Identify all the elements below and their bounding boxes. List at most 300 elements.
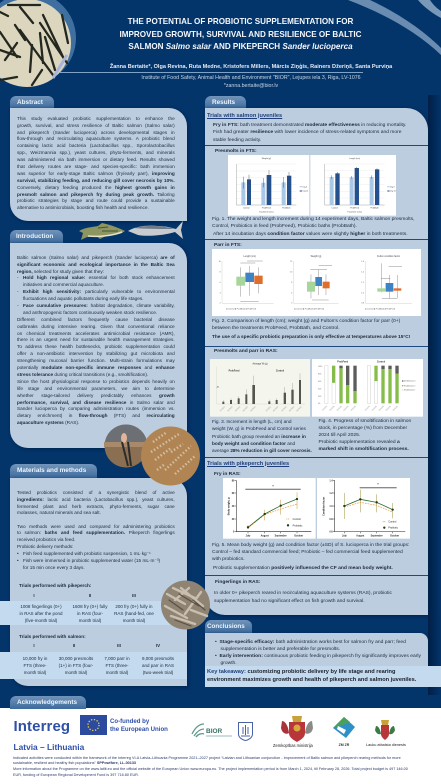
panel: introduction: [10, 243, 187, 448]
text: fry in FTS: Fry in FTS: bath treatment demonstrated moderate effectiveness in reducing mortality.: [213, 123, 406, 128]
chart: fig 5 body weight: 0: [233, 532, 235, 534]
panel: materials and methods: [10, 478, 187, 686]
chart: fig 4 smoltification stacked bars: ProbFeed: [337, 361, 348, 363]
chart: fig 3 average weight: 02/2025: [235, 406, 241, 412]
chart: fig 5 body weight: Body weight, g: [228, 497, 231, 515]
header photo: salmon fry: [0, 0, 76, 87]
introduction text: region, selected for study given that they:: [17, 269, 104, 274]
chart: fig 5 condition factor: 0.6: [329, 532, 333, 534]
chart: fig 1 weight and length: Weight (g): [262, 157, 271, 160]
callout: key takeaway: environment maximizes growth and health of pikeperch and salmon juveniles.: [207, 677, 416, 683]
chart: fig 1 weight and length: Length (cm): [349, 157, 360, 160]
text: probiotic influence: Probiotic supplementation positively influenced the CF and mean body weight.: [213, 566, 393, 570]
chart: fig 3 average weight: 04/2025: [250, 406, 256, 412]
chart: fig 4 smoltification stacked bars: 80%: [318, 374, 322, 376]
abstract text: was administered via bath immersion or dietary feed. Results showed: [17, 157, 175, 162]
chart: fig 1 weight and length: ProbFeed: [262, 206, 271, 209]
trial I salmon: 10,000 fry in: [23, 656, 47, 660]
chart: fig 5 condition factor: Condition factor: [322, 497, 325, 516]
chart: fig 5 condition factor: October: [390, 535, 399, 538]
text: probiotic bath group: Probiotic bath group revealed an increase in: [212, 434, 306, 438]
affiliation: Institute of Food Safety, Animal Health and Environment "BIOR", Lejupes iela 3, Riga, LV-1076: [141, 75, 361, 81]
methods text: delivery: Fish were immersed in probiotic supplemented water (15 mL·m⁻³): [23, 558, 160, 563]
trial IV salmon: and parr in RAS: [142, 662, 174, 668]
trial II salmon: month trial): [65, 670, 87, 674]
text: probiotic bath group: [212, 434, 312, 453]
abstract text: alternative to antimicrobials, boosting fish health and resilience.: [17, 205, 149, 210]
panel: results: [205, 108, 428, 615]
text: fry in FTS: [213, 122, 406, 142]
chart: fig 1 weight and length: Day 0: [390, 186, 395, 188]
text: fry in FTS: Fish had greater resilience with lower incidence of stress-related symptoms and more: [213, 130, 402, 135]
chart: fig 2 boxplots: 1.2: [361, 282, 364, 284]
introduction text: and anthropogenic factors continuously weaken stock resilience.: [23, 310, 157, 315]
trial III pikeperch: RAS (hand-fed, one: [114, 611, 154, 616]
trial I pikeperch: [19, 593, 63, 623]
chart: fig 4 smoltification stacked bars: 12/2024: [322, 406, 328, 412]
photo: fish eggs: [141, 426, 200, 486]
logo: BIOR: BIOR: [206, 728, 223, 735]
introduction text: performance, survival, and disease resilience in Salmo salar and: [17, 400, 175, 404]
chart: fig 4 smoltification stacked bars: 03/2025: [385, 406, 391, 412]
icon: salmon: [128, 221, 183, 239]
chart: fig 1 weight and length: [228, 155, 396, 216]
chart: fig 1 weight and length: Day 14: [303, 191, 308, 193]
chart: fig 4 smoltification stacked bars: 02/2025: [378, 406, 384, 412]
methods text: delivery: for 15 min once every 3 days.: [23, 565, 85, 570]
chart: fig 4 smoltification stacked bars: 01/2025: [371, 406, 377, 412]
chart: fig 5 condition factor: September: [370, 535, 382, 538]
text: fingerlings result: supplementation had no significant effect on fish growth and survival.: [214, 598, 365, 604]
funding note: More information about the Programme on the www.latlit.eu and the official website of the European Union www.europa.eu. The project implementation period is from March 1, 2024, till February 28, 2026. Total project budget is 497 146.00: [13, 767, 408, 771]
title: SALMON Salmo salar AND PIKEPERCH Sander lucioperca: [128, 42, 353, 51]
chart: fig 2 boxplots: Length (cm): [243, 255, 256, 258]
caption and text: fig 4: [318, 418, 411, 452]
chart: fig 4 smoltification stacked bars: 100%: [318, 366, 322, 368]
panel: conclusions: [205, 633, 428, 667]
trial I salmon: FTS (three-: [23, 662, 47, 668]
chart: fig 4 smoltification stacked bars: Smoltification 2: [404, 384, 415, 387]
introduction text: Since the host physiological response to probiotics depends heavily on: [17, 379, 175, 384]
chart: fig 5 condition factor: 1.0: [329, 506, 333, 508]
logo: Interreg: Interreg: [14, 718, 70, 735]
trial IV salmon: [142, 643, 174, 675]
chart: fig 4 smoltification stacked bars: 20%: [318, 396, 322, 398]
trial IV salmon: IV: [156, 643, 160, 648]
introduction text: fluctuations and aquatic pollutants during early life stages.: [23, 296, 144, 301]
chart: fig 5 body weight: 60: [232, 493, 235, 495]
trial II pikeperch: month trial): [79, 618, 101, 623]
authors: Žanna Bertaite*, Olga Revina, Ruta Medne, Kristofers Millers, Mārcis Ziņģis, Rainers Džeriņš, Santa Purviņa: [110, 64, 392, 70]
trial III pikeperch: [114, 593, 154, 623]
trial IV salmon: 9,000 presmolts: [142, 656, 174, 660]
heading: pikeperch trials: Trials performed with pikeperch:: [19, 582, 91, 588]
icon: pikeperch: [79, 223, 125, 240]
methods text: delivery: Two methods were used and compared for administering probiotics: [17, 524, 175, 528]
introduction text: To address these health bottlenecks, probiotic supplementation could: [17, 344, 175, 349]
heading tab: abstract: Abstract: [17, 99, 43, 106]
abstract text: survival, stabilizing feeding, and reducing gill cover necrosis by 10%.: [17, 178, 175, 183]
trial II salmon: 30,000 presmolts: [59, 656, 93, 660]
trial II pikeperch: in RAS (four-: [77, 611, 103, 616]
text: Latvia Lithuania: Latvia – Lithuania: [14, 742, 84, 752]
chart: fig 5 body weight: Control: [293, 518, 301, 521]
logo: shield: [238, 722, 253, 741]
chart: fig 5 body weight: 80: [232, 480, 235, 482]
trial III pikeperch: month trial): [123, 618, 145, 623]
chart: fig 5 body weight: 40: [232, 505, 235, 508]
chart: fig 3 average weight: 01/2025: [227, 406, 233, 412]
chart: fig 5 body weight: Probiotic: [293, 524, 303, 527]
caption: fig 5: Control – fed standard commercial feed; Probiotic – fed commercial feed supplemented: [212, 550, 403, 554]
funding note: Indicated activities were conducted within the framework of the Interreg VI-A Latvia–Lithuania Programme 2021–2027 project “Latvian and Lithuanian conjunction - Improvement of Baltic salmon and pikeperch rearing methods for more: [13, 756, 401, 760]
chart: fig 4 smoltification stacked bars: [312, 359, 423, 417]
caption and text: fig 4: Probiotic supplementation revealed a: [318, 440, 400, 444]
chart: fig 5 condition factor: August: [356, 535, 364, 538]
chart: fig 5 condition factor: Control: [388, 521, 396, 524]
introduction text: life stage and environmental parameters, we aim to determine: [17, 386, 175, 391]
trial II salmon: [58, 643, 94, 675]
subheading: parr in FTS: Parr in FTS:: [214, 242, 242, 248]
methods text: delivery: [17, 524, 175, 570]
introduction text: Different combined factors frequently cause bacterial disease: [17, 317, 175, 322]
trial II salmon: II: [73, 643, 75, 648]
logo: BIOR: [192, 723, 232, 738]
trial I salmon: I: [33, 643, 35, 648]
trial III salmon: III: [117, 643, 121, 648]
trial III salmon: FTS (three-: [105, 662, 128, 668]
band: pikeperch trials: [0, 601, 175, 625]
introduction text: [17, 255, 175, 425]
chart: fig 2 boxplots: 6: [220, 282, 221, 284]
text: co-funded: the European Union: [110, 726, 168, 732]
photo: tweezers with larva: [104, 424, 146, 468]
caption: fig 5: [212, 542, 409, 562]
caption and text: fig 4: 2024 till April 2025.: [318, 432, 360, 438]
funding note: sustainable, resilient and healthy fish populations” SPPowlfore, LL-00133: [13, 761, 136, 765]
caption: fig 1: Control, Probiotics in feed (ProbFeed), Probiotic baths (ProbBath).: [212, 224, 357, 229]
chart: fig 3 average weight: 04/2025: [296, 406, 302, 412]
chart: fig 5 condition factor: 1.2: [329, 493, 333, 495]
chart: fig 3 average weight: Average W (g): [253, 363, 268, 366]
chart: fig 4 smoltification stacked bars: Smoltification 1: [404, 389, 415, 392]
trial III pikeperch: III: [132, 593, 136, 598]
band: salmon trials: [0, 652, 187, 679]
chart: fig 2 boxplots: 2: [220, 302, 221, 304]
methods text: ingredients: molasses, natural minerals and sea salt.: [17, 510, 101, 515]
trial III salmon: [104, 643, 130, 675]
funding note: [13, 756, 413, 778]
heading tab: introduction: Introduction: [16, 233, 53, 240]
heading tab: materials and methods: Materials and methods: [17, 467, 86, 474]
chart: fig 1 weight and length: Control: [243, 206, 250, 209]
chart: fig 4 smoltification stacked bars: 02/2025: [336, 406, 342, 412]
chart: fig 3 average weight: 02/2025: [281, 406, 287, 412]
trial I salmon: month trial): [24, 670, 46, 674]
methods text: delivery: •: [17, 558, 19, 563]
chart: fig 1 weight and length: Treatment series: [259, 211, 274, 214]
chart: fig 2 boxplots: ■ Control ■ ProbBath ■ ProbFeed: [365, 308, 395, 311]
introduction text: Hold high regional value: essential for both stock enhancement: [23, 275, 175, 280]
chart: fig 3 average weight: 12/2024: [266, 406, 272, 412]
chart: fig 4 smoltification stacked bars: 12/2024: [364, 406, 370, 412]
chart: fig 1 weight and length: ProbBath: [282, 206, 290, 209]
chart: fig 1 weight and length: Treatment series: [347, 211, 362, 214]
callout: key takeaway: Key takeaway: customizing probiotic delivery by life stage and rearing: [207, 668, 395, 674]
callout: key takeaway: [205, 666, 441, 687]
trial III salmon: 7,000 parr in: [104, 656, 130, 660]
introduction text: potentially modulate non-specific immune responses and enhance: [17, 365, 175, 370]
chart: fig 5 condition factor: 1.4: [329, 479, 333, 482]
subheading: presmolts and parr in RAS: Presmolts and parr in RAS:: [214, 348, 278, 354]
caption: fig 2: Fig. 2. Comparison of length (cm); weight (g) and Fulton’s condition factor for parr (0+): [212, 318, 400, 324]
chart: fig 5 body weight: [223, 478, 316, 539]
chart: fig 1 weight and length: Day 14: [390, 191, 396, 193]
introduction text: aquaculture systems (RAS).: [17, 420, 79, 425]
introduction text: -: [17, 289, 19, 294]
panel: abstract: [10, 108, 187, 221]
chart: fig 2 boxplots: 1.4: [361, 271, 364, 273]
footer background: [0, 708, 441, 784]
chart: fig 2 boxplots: 0.8: [361, 302, 364, 304]
heading tab: introduction: [10, 230, 63, 243]
introduction text: Exhibit high sensitivity: particularly vulnerable to environmental: [23, 289, 175, 294]
trial I pikeperch: I: [33, 593, 35, 598]
methods text: delivery: •: [17, 551, 19, 556]
conclusions bullets: supplementation is better and preferable for presmolts.: [220, 647, 340, 652]
introduction text: there is an urgent need for sustainable health management strategies.: [17, 337, 175, 342]
caption: fig 5: with probiotics.: [212, 556, 245, 562]
photo: pikeperch fingerlings: [161, 580, 210, 630]
text: fingerlings result: In older 0+ pikeperch reared in recirculating aquaculture systems (RAS), probiotic: [214, 591, 392, 596]
introduction text: Sander lucioperca by comparing administration routes (immersion vs.: [17, 406, 175, 411]
methods text: delivery: to salmon: baths and feed supplementation. Pikeperch fingerlings: [17, 530, 175, 535]
trial I pikeperch: in RAS after the pond: [19, 611, 63, 616]
text: temperature note: The use of a specific probiotic preparation is only effective at temperatures above 15°C!: [212, 335, 410, 340]
title: [120, 17, 362, 51]
methods text: ingredients: fermented plant and herb extracts, phyto-ferments, sugar cane: [17, 504, 175, 509]
chart: fig 1 weight and length: ProbBath: [370, 206, 379, 209]
chart: fig 5 body weight: September: [275, 535, 287, 538]
conclusions bullets: [215, 640, 421, 666]
heading tab: acknowledgements: Acknowledgements: [17, 699, 77, 706]
introduction text: Face cumulative pressures: habitat degradation, climate variability,: [23, 303, 175, 308]
logo: rural support service: [374, 717, 396, 743]
text: condition factor: After 14 incubation days condition factor values were slightly higher in both treatments.: [213, 232, 408, 237]
caption: fig 3: Fig. 3. Increment in length (L, cm) and: [212, 418, 291, 424]
chart: fig 5 condition factor: [317, 478, 410, 539]
caption: fig 2: between the treatments ProbFeed, ProbBath, and Control.: [212, 326, 340, 330]
chart: fig 3 average weight: 01/2025: [273, 406, 279, 412]
text: co-funded: Co-funded by: [110, 718, 149, 724]
trial II pikeperch: [72, 593, 108, 623]
heading: salmon juveniles: Trials with salmon juveniles: [207, 112, 282, 118]
chart: fig 4 smoltification stacked bars: 04/2025: [392, 406, 398, 412]
logo: green blue emblem: ZM ZR: [339, 743, 350, 747]
chart: fig 3 average weight: Control: [276, 370, 284, 373]
subheading: fingerlings in RAS: Fingerlings in RAS:: [215, 580, 260, 585]
heading: pikeperch juveniles: Trials with pikeperch juveniles: [207, 460, 289, 466]
conclusions bullets: • Early intervention: continuous probiotic feeding in pikeperch fry significantly improves early: [215, 654, 421, 659]
chart: fig 2 boxplots: 1.0: [361, 293, 364, 295]
introduction text: -: [17, 303, 19, 308]
chart: fig 5 body weight: *: [273, 485, 275, 489]
chart: fig 5 condition factor: July: [342, 536, 347, 538]
heading tab: abstract: [10, 96, 54, 109]
introduction text: on chemical treatments accelerates antimicrobial resistance (AMR),: [17, 331, 175, 336]
caption: ministry: Zemkopības ministrija: [273, 743, 313, 748]
introduction text: outbreaks during intensive rearing. Given that conventional reliance: [17, 324, 175, 329]
chart: fig 5 condition factor: *: [377, 483, 379, 487]
introduction text: strengthening mucosal barrier function. Multi-strain formulations may: [17, 358, 175, 363]
heading tab: conclusions: Conclusions: [207, 623, 245, 630]
text: probiotic bath group: body weight and condition factor and: [212, 441, 295, 446]
abstract text: was superior for early-stage Baltic salmon (fry/early parr), improving: [17, 171, 175, 176]
abstract text: flow-through and recirculating aquaculture systems. A probiotic blend: [17, 136, 175, 141]
header swooshes: [348, 0, 441, 55]
chart: fig 3 average weight: -M-: [216, 387, 219, 389]
introduction text: dietary enrichment) in flow-through (FTS) and recirculating: [17, 413, 175, 418]
methods text: delivery: Fish feed supplemented with probiotic suspension, 1 mL·kg⁻¹: [23, 551, 151, 556]
title: IMPROVED GROWTH, SURVIVAL AND RESILIENCE OF BALTIC: [120, 30, 361, 39]
chart: fig 2 boxplots: 10: [219, 261, 221, 263]
chart: fig 2 boxplots: 4: [220, 293, 221, 295]
chart: fig 4 smoltification stacked bars: Control: [377, 360, 385, 363]
logo: green blue emblem: [332, 716, 356, 748]
chart: fig 3 average weight: 03/2025: [243, 406, 249, 412]
subheading: presmolts in FTS: Presmolts in FTS:: [215, 149, 257, 154]
chart: fig 2 boxplots: [212, 249, 421, 316]
abstract text: probiotic strategies by stage and route could provide a sustainable: [17, 198, 175, 203]
methods text: delivery: received probiotics via feed.: [17, 537, 75, 542]
methods text: ingredients: [17, 490, 175, 515]
caption: fig 3: weight (W, g) in ProbFeed and Control series: [212, 426, 306, 431]
chart: fig 2 boxplots: Fulton condition factor: [377, 255, 400, 258]
chart: fig 1 weight and length: ProbFeed: [350, 206, 359, 209]
caption: fig 2: [212, 318, 400, 330]
right edge shading: [428, 95, 441, 695]
trial I salmon: [22, 643, 48, 675]
trial II pikeperch: II: [89, 593, 91, 598]
introduction text: Baltic salmon (Salmo salar) and pikeperch (Sander lucioperca) are of: [17, 255, 175, 260]
abstract text: presmolt salmon and pikeperch fry during peak growth. Tailoring: [17, 192, 175, 197]
abstract text: Conversely, dietary feeding produced the highest growth gains in: [17, 185, 175, 190]
chart: fig 1 weight and length: Control: [331, 206, 338, 209]
chart: fig 2 boxplots: 1.6: [361, 261, 364, 263]
logo: ministry of agriculture: [278, 713, 316, 744]
abstract text: spp., Weizmannia spp.), yeast cultures, phyto-ferments, and minerals: [17, 150, 175, 155]
chart: fig 5 body weight: 20: [232, 519, 235, 521]
chart: fig 5 body weight: October: [295, 535, 304, 538]
caption and text: fig 4: stock, in percentage (%) from December: [318, 426, 407, 430]
chart: fig 3 average weight: 03/2025: [289, 406, 295, 412]
title: THE POTENTIAL OF PROBIOTIC SUPPLEMENTATION FOR: [128, 17, 353, 26]
trial I pikeperch: (five-month trial): [25, 618, 57, 623]
chart: fig 5 body weight: July: [246, 536, 251, 538]
caption: fig 3: [212, 418, 306, 431]
abstract text: This study evaluated probiotic supplementation to enhance the: [17, 116, 175, 121]
chart: fig 4 smoltification stacked bars: 03/2025: [343, 406, 349, 412]
trial III salmon: month trial): [106, 670, 128, 674]
chart: fig 5 body weight: August: [261, 535, 269, 538]
chart: fig 2 boxplots: 8: [220, 271, 221, 273]
funding note: EUR, funding of European Regional Development Fund is 397 716.80 EUR.: [13, 773, 139, 777]
trial III pikeperch: 200 fry (0+) fully in: [115, 604, 153, 609]
introduction text: stress tolerance during critical transitions (e.g., smoltification).: [17, 372, 148, 377]
abstract text: containing lactic acid bacteria (Lactobacillus spp., Sporolactobacillus: [17, 143, 175, 148]
chart: fig 2 boxplots: 0: [291, 302, 292, 304]
caption: fig 5: Fig. 5. Mean body weight (g) and condition factor (±SD) of S. lucioperca in the trial groups:: [212, 542, 409, 548]
chart: fig 3 average weight: [210, 359, 310, 417]
chart: fig 2 boxplots: 12: [290, 261, 292, 263]
methods text: ingredients: ingredients: lactic acid bacteria (Lactobacillus spp.), yeast cultures,: [17, 497, 175, 502]
chart: fig 2 boxplots: 8: [291, 282, 292, 284]
trial I pikeperch: 1008 fingerlings (0+): [20, 604, 62, 609]
chart: fig 4 smoltification stacked bars: 01/2025: [329, 406, 335, 412]
methods text: delivery: Probiotic delivery methods:: [17, 544, 73, 549]
text: co-funded: [110, 718, 168, 732]
chart: fig 5 condition factor: Probiotic: [388, 527, 398, 530]
chart: fig 2 boxplots: Weight (g): [311, 255, 322, 258]
introduction text: offer a non-antibiotic intervention by stabilizing gut microbiota and: [17, 351, 175, 356]
affiliation: *zanna.bertaite@bior.lv: [224, 83, 278, 89]
caption and text: fig 4: marked shift in smoltification process.: [318, 446, 409, 452]
abstract text: growth, survival, and stress resilience of Baltic salmon (Salmo salar): [17, 123, 175, 128]
caption: rural support service: Lauku atbalsta dienests: [366, 742, 406, 746]
chart: fig 1 weight and length: Day 0: [303, 186, 307, 188]
chart: fig 5 condition factor: 0.8: [329, 519, 333, 521]
text: fingerlings result: [214, 590, 392, 604]
heading tab: acknowledgements: [10, 696, 86, 709]
chart: fig 4 smoltification stacked bars: 0%: [318, 403, 321, 405]
chart: fig 4 smoltification stacked bars: 60%: [318, 381, 322, 383]
chart: fig 3 average weight: ProbFeed: [229, 371, 240, 373]
subheading: fry in RAS: Fry in RAS:: [214, 472, 241, 476]
chart: fig 3 average weight: 12/2024: [220, 406, 226, 412]
chart: fig 2 boxplots: ■ Control ■ ProbBath ■ ProbFeed: [294, 308, 324, 311]
abstract text: [17, 116, 175, 210]
introduction text: -: [17, 275, 19, 280]
introduction text: whether stage-tailored delivery predictably enhances growth: [17, 393, 175, 398]
introduction text: initiatives and commercial aquaculture.: [23, 282, 104, 287]
chart: fig 4 smoltification stacked bars: 40%: [318, 389, 322, 391]
heading tab: results: [205, 96, 246, 109]
chart: fig 2 boxplots: 4: [291, 293, 292, 295]
heading tab: conclusions: [205, 620, 252, 633]
chart: fig 4 smoltification stacked bars: 04/2025: [350, 406, 356, 412]
caption and text: fig 4: Fig. 4. Progress of smoltification in salmon: [318, 418, 411, 424]
conclusions bullets: • Stage-specific efficacy: bath administration works best for salmon fry and parr; feed: [215, 640, 406, 645]
chart: fig 2 boxplots: 10: [290, 271, 292, 273]
trial IV salmon: (two-week trial): [143, 670, 173, 674]
caption: fig 1: Fig. 1. The weight and length increment during 14 experiment days, Baltic salmon presmolts,: [212, 217, 414, 222]
conclusions bullets: growth.: [220, 661, 237, 666]
text: fry in FTS: stable feeding activity.: [213, 138, 261, 142]
text: probiotic bath group: average 28% reduction in gill cover necrosis.: [212, 448, 312, 453]
abstract text: and pikeperch (Sander lucioperca) across developmental stages in: [17, 130, 175, 135]
chart: fig 4 smoltification stacked bars: Smoltification 3: [404, 380, 415, 383]
logo: EU flag: [80, 715, 107, 735]
heading tab: results: Results: [212, 99, 235, 106]
header rule: [60, 72, 363, 73]
trial II pikeperch: 1608 fry (0+) fully: [73, 604, 107, 609]
chart: fig 2 boxplots: ■ Control ■ ProbBath ■ ProbFeed: [226, 308, 256, 311]
introduction text: significant economic and ecological importance in the Baltic Sea: [17, 262, 175, 267]
affiliation: [141, 75, 361, 89]
caption: fig 1: [212, 216, 414, 229]
heading tab: materials and methods: [10, 464, 97, 478]
methods text: ingredients: Tested probiotics consisted of a synergistic blend of active: [17, 490, 175, 495]
